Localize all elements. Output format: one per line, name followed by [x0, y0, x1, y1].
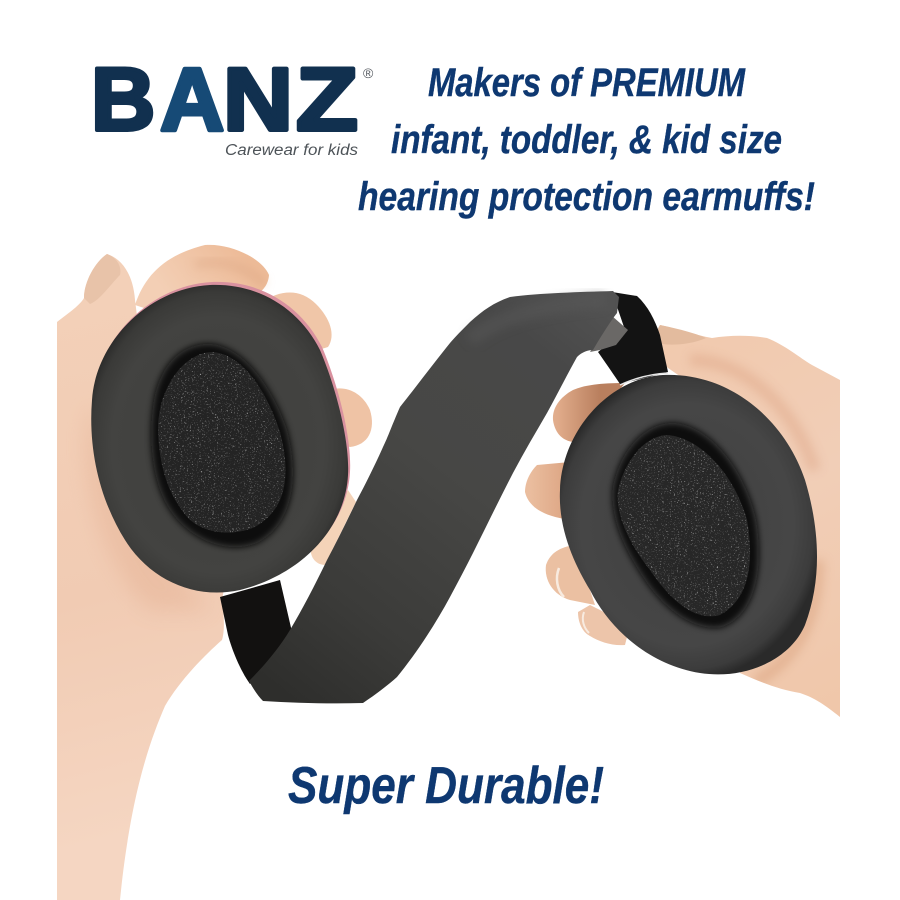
band top highlight	[470, 300, 605, 340]
right thumb nail	[655, 325, 706, 345]
right hand palm and thumb	[655, 325, 840, 717]
registered mark: ®	[363, 65, 374, 81]
left earcup	[91, 282, 350, 593]
foam	[158, 352, 286, 532]
caption: Super Durable!: Super Durable!	[288, 757, 604, 815]
left hand shading	[87, 434, 196, 610]
heading line 2: infant, toddler, & kid size	[391, 118, 782, 162]
logo wordmark: A	[160, 49, 224, 149]
left thumb nail	[84, 254, 120, 304]
right earcup	[560, 373, 817, 674]
cushion opening	[151, 344, 293, 547]
left hand	[57, 245, 372, 900]
right strap underside	[598, 292, 668, 384]
logo wordmark: Z	[296, 49, 358, 149]
logo tagline: Carewear for kids	[225, 142, 358, 159]
logo wordmark: B	[91, 49, 155, 149]
cushion	[560, 375, 817, 674]
heading text	[358, 61, 815, 219]
heading line 1: Makers of PREMIUM	[428, 61, 746, 105]
headband	[220, 291, 668, 703]
right hand	[525, 325, 840, 717]
white shell rim	[620, 373, 668, 385]
right hand shading	[690, 360, 818, 682]
left hand palm and arm	[57, 254, 240, 900]
left hand fingers behind earcup	[135, 245, 269, 320]
band inner highlight	[590, 316, 628, 352]
logo wordmark: N	[223, 49, 293, 149]
heading line 3: hearing protection earmuffs!	[358, 175, 815, 219]
right hand fingers	[553, 383, 625, 442]
cushion opening	[613, 423, 759, 628]
pink shell rim	[93, 282, 350, 590]
finger shadow	[195, 263, 264, 284]
right finger nails	[557, 568, 564, 597]
left strap underside	[220, 580, 292, 684]
band main surface	[249, 291, 619, 703]
logo wordmark	[91, 49, 358, 149]
logo: BANZ Carewear for kids	[91, 49, 374, 159]
cushion	[91, 285, 348, 593]
foam	[618, 435, 750, 616]
